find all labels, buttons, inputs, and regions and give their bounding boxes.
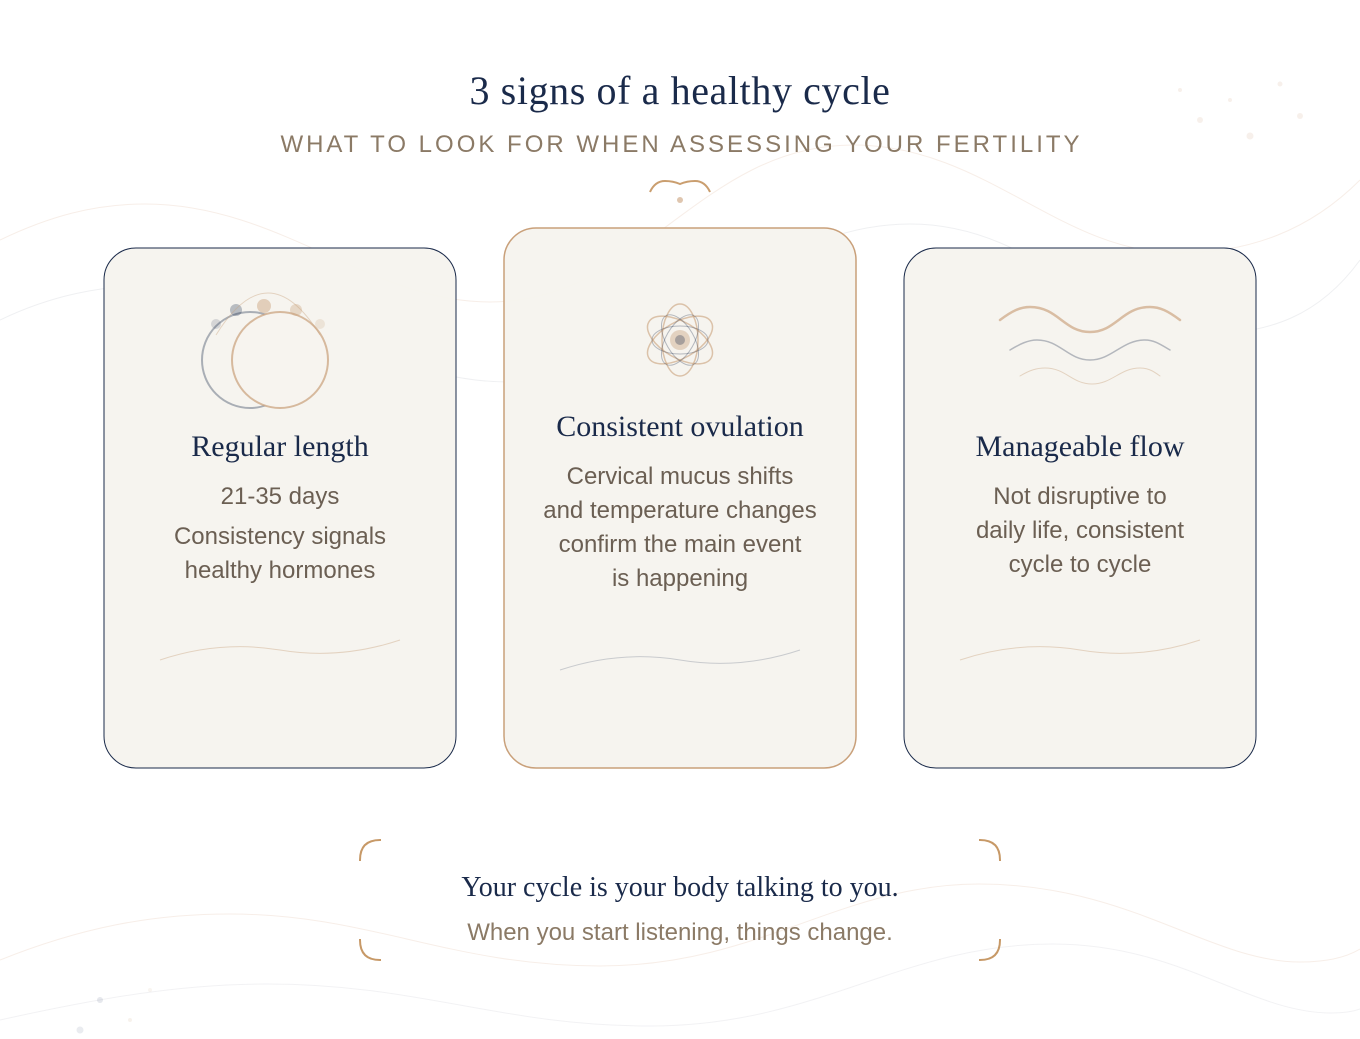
- title: 3 signs of a healthy cycle: [469, 68, 891, 113]
- heading: consistent ovulation: Consistent ovulation: [556, 410, 804, 443]
- text: manageable flow body: daily life, consistent: [976, 517, 1184, 544]
- text: manageable flow body: Not disruptive to: [993, 483, 1167, 510]
- ornament: header flourish: [650, 181, 710, 203]
- closing subline: When you start listening, things change.: [467, 919, 893, 946]
- panel: manageable flow: [904, 248, 1256, 768]
- text: consistent ovulation body: is happening: [612, 565, 748, 592]
- closing statement: Your cycle is your body talking to you.: [461, 872, 899, 903]
- panel: consistent ovulation: [504, 228, 856, 768]
- panel: regular length: [104, 248, 456, 768]
- icon: atom ovulation: [640, 304, 720, 376]
- heading: manageable flow: Manageable flow: [975, 430, 1185, 463]
- text: regular length body: healthy hormones: [185, 557, 375, 584]
- ornament: corner brackets: [360, 840, 1000, 960]
- text: consistent ovulation body: and temperature changes: [543, 497, 817, 524]
- subtitle: WHAT TO LOOK FOR WHEN ASSESSING YOUR FERTILITY: [280, 131, 1083, 158]
- text: consistent ovulation body: confirm the main event: [559, 531, 802, 558]
- text: consistent ovulation body: Cervical mucus shifts: [567, 463, 793, 490]
- icon: flow waves: [1000, 307, 1180, 384]
- text: manageable flow body: cycle to cycle: [1009, 551, 1151, 578]
- text: regular length body: 21-35 days: [221, 483, 339, 510]
- heading: regular length: Regular length: [191, 430, 369, 463]
- text: regular length body: Consistency signals: [174, 523, 386, 550]
- icon: overlapping cycle circles: [202, 293, 328, 408]
